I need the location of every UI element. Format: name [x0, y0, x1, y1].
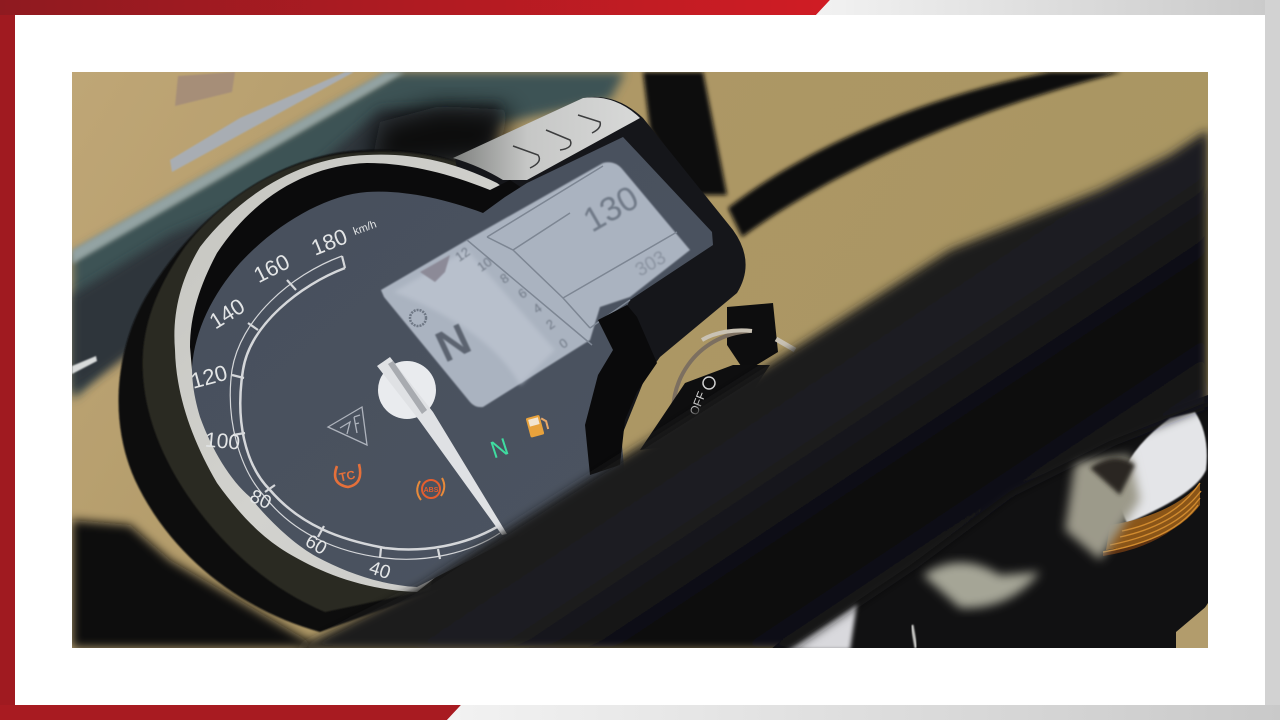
- speed scale arcs: [230, 256, 500, 559]
- LCD rev scale numbers: 10: [474, 254, 495, 275]
- fork assembly below handlebar: [770, 395, 1208, 650]
- silver dial ring: [174, 154, 500, 592]
- windscreen: [72, 72, 625, 400]
- speed numerals: 140: [205, 293, 249, 334]
- fork disc: [1119, 412, 1207, 523]
- warning icon: traction control: TC: [338, 468, 357, 485]
- speed numerals: 100: [204, 429, 241, 455]
- warning icon: ABS: ABS: [424, 487, 439, 494]
- LCD speed reading: 130: [577, 179, 645, 240]
- LCD rev scale numbers: 2: [543, 316, 558, 333]
- blurred fork clamp: [1065, 455, 1140, 560]
- neutral indicator: N: [487, 433, 512, 464]
- logo triangle: [328, 407, 367, 445]
- sticker on windscreen: [170, 72, 354, 172]
- ignition key and lock: [640, 303, 795, 450]
- speed numerals: 180: [307, 224, 351, 261]
- LCD odometer: 303: [632, 247, 670, 281]
- LCD housing: [453, 97, 746, 440]
- speed numerals: 80: [246, 486, 274, 514]
- dial face: [192, 137, 713, 587]
- LCD rev scale numbers: [456, 247, 568, 348]
- fuel indicator: [526, 413, 549, 438]
- speed numerals: [188, 218, 393, 584]
- LCD gear indicator: N: [429, 314, 478, 372]
- cable: [728, 72, 1122, 237]
- outer bezel: [119, 150, 520, 632]
- LCD display: [381, 162, 690, 407]
- brass layers: [1103, 528, 1174, 556]
- speed numerals: 120: [188, 360, 230, 394]
- speed numerals: 60: [301, 531, 330, 560]
- LCD rev scale numbers: 4: [530, 300, 545, 317]
- black inner wall: [190, 163, 525, 370]
- lower left dark shadow: [72, 520, 320, 648]
- speed numerals: 40: [366, 558, 393, 584]
- LCD sun icon: [410, 310, 426, 326]
- warning icon: traction control: [335, 464, 360, 487]
- tan corner: [1176, 605, 1208, 648]
- blurred handlebar in foreground: [295, 130, 1208, 650]
- dark stem behind the cluster: [643, 72, 727, 195]
- LCD rev scale numbers: 12: [452, 244, 473, 265]
- speed numerals: 160: [250, 249, 294, 288]
- photo: [72, 72, 1208, 650]
- white patch: [785, 603, 857, 650]
- LCD rev scale numbers: 6: [515, 285, 530, 302]
- warning icon: ABS: [417, 478, 444, 500]
- lever clip beside display: [585, 305, 657, 475]
- LCD rev scale numbers: 8: [497, 270, 512, 287]
- ignition key and lock: OFF: [687, 390, 709, 417]
- photo background: blurred tan: [72, 72, 1208, 648]
- needle: [377, 357, 507, 535]
- speed numerals: km/h: [352, 218, 378, 238]
- LCD rev scale numbers: 0: [556, 335, 571, 352]
